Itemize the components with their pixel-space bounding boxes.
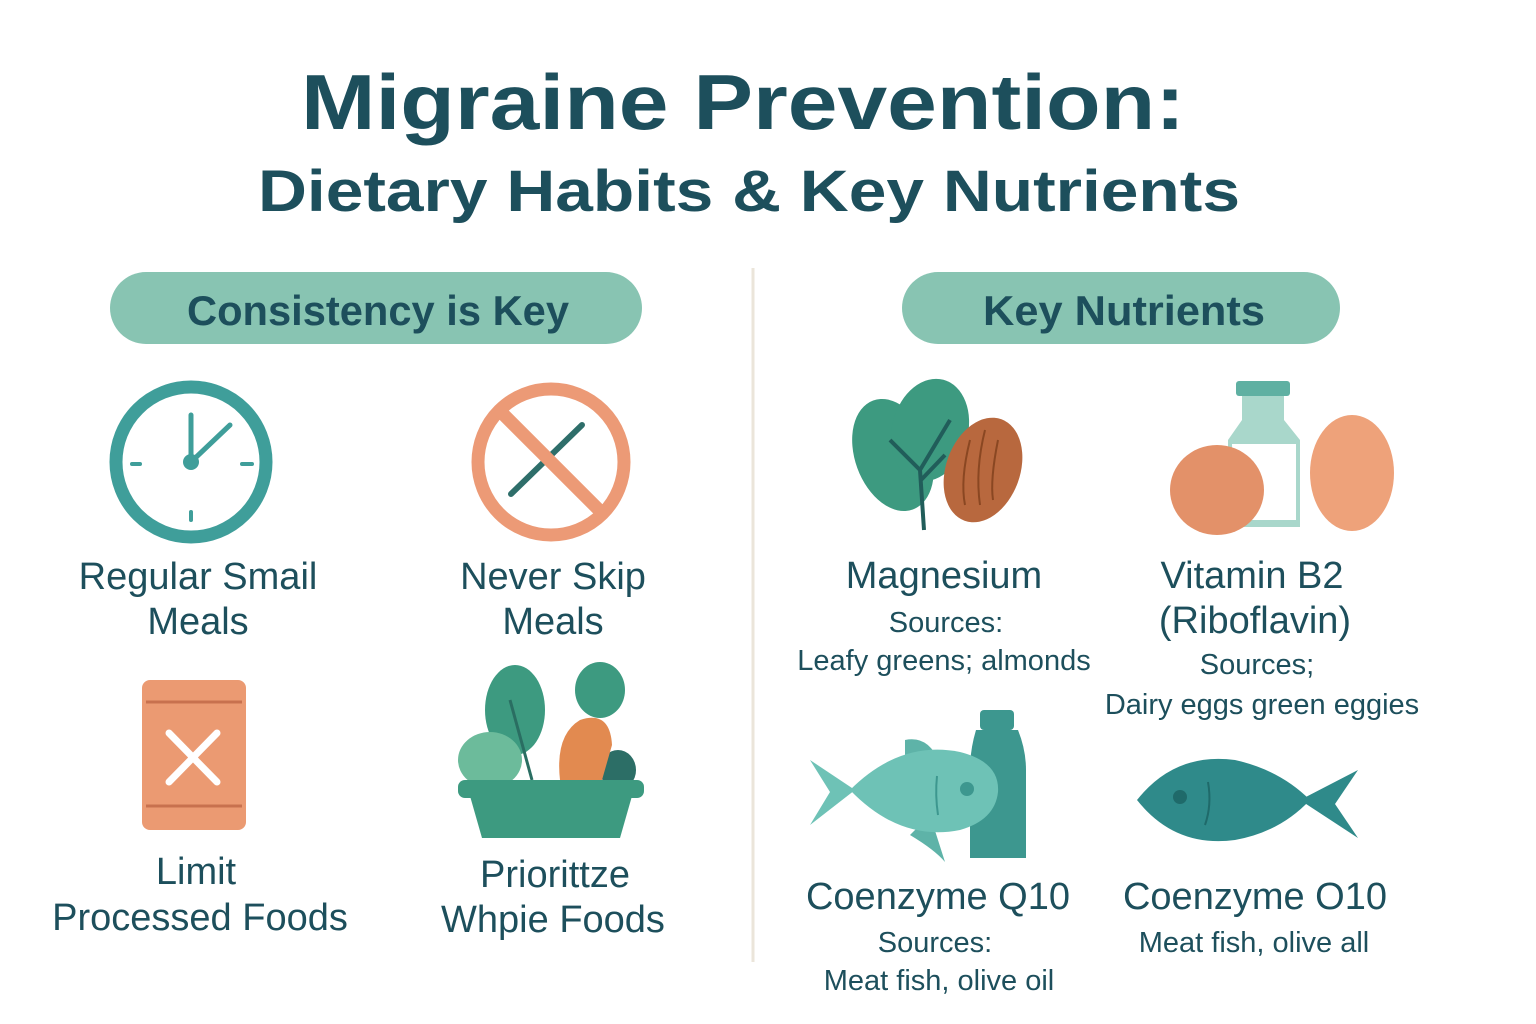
label: Coenzyme Q10 right: Coenzyme O10	[1123, 876, 1387, 918]
pill: Consistency is Key: Consistency is Key	[187, 287, 570, 334]
label: Limit Processed Foods: Limit	[156, 851, 237, 893]
label: Coenzyme Q10 left: Sources:	[878, 927, 992, 959]
label: Coenzyme Q10 left	[806, 876, 1070, 997]
label: Coenzyme Q10 right	[1123, 876, 1387, 959]
icon: vegetable basket	[458, 662, 644, 838]
label: Coenzyme Q10 left: Coenzyme Q10	[806, 876, 1070, 918]
label: Magnesium	[797, 555, 1091, 677]
icon: processed food package	[142, 680, 246, 830]
label: Limit Processed Foods	[52, 851, 348, 939]
label: Magnesium: Magnesium	[846, 555, 1042, 597]
icon: fish	[1137, 759, 1358, 841]
icon: leafy greens and almond	[837, 370, 1036, 533]
label: Regular Small Meals	[79, 556, 317, 643]
pill: Key Nutrients: Key Nutrients	[983, 287, 1265, 334]
label: Vitamin B2: Sources;	[1200, 649, 1314, 681]
label: Prioritize Whole Foods: Priorittze	[480, 854, 630, 896]
label: Prioritize Whole Foods: Whpie Foods	[441, 899, 665, 941]
label: Never Skip Meals: Never Skip	[460, 556, 646, 598]
label: Never Skip Meals	[460, 556, 646, 643]
icon: fish and oil bottle	[810, 710, 1026, 862]
label: Regular Small Meals: Regular Smail	[79, 556, 317, 598]
label: Limit Processed Foods: Processed Foods	[52, 897, 348, 939]
label: Vitamin B2	[1105, 555, 1419, 721]
label: Vitamin B2: (Riboflavin)	[1159, 600, 1351, 642]
label: Vitamin B2: Dairy eggs green eggies	[1105, 689, 1419, 721]
title	[258, 58, 1240, 224]
label: Magnesium: Leafy greens; almonds	[797, 645, 1091, 677]
label: Regular Small Meals: Meals	[147, 601, 249, 643]
label: Coenzyme Q10 left: Meat fish, olive oil	[824, 965, 1054, 997]
subtitle: Dietary Habits & Key Nutrients	[258, 159, 1240, 224]
icon: clock	[116, 387, 266, 537]
label: Never Skip Meals: Meals	[502, 601, 604, 643]
label: Magnesium: Sources:	[889, 607, 1003, 639]
pill: Key Nutrients	[902, 272, 1340, 344]
icon: milk and eggs	[1170, 381, 1394, 535]
title: Migraine Prevention:	[301, 58, 1185, 146]
label: Vitamin B2: Vitamin B2	[1160, 555, 1344, 597]
label: Coenzyme Q10 right: Meat fish, olive all	[1139, 927, 1369, 959]
icon: no sign	[478, 389, 624, 535]
label: Prioritize Whole Foods	[441, 854, 665, 941]
pill: Consistency is Key	[110, 272, 642, 344]
